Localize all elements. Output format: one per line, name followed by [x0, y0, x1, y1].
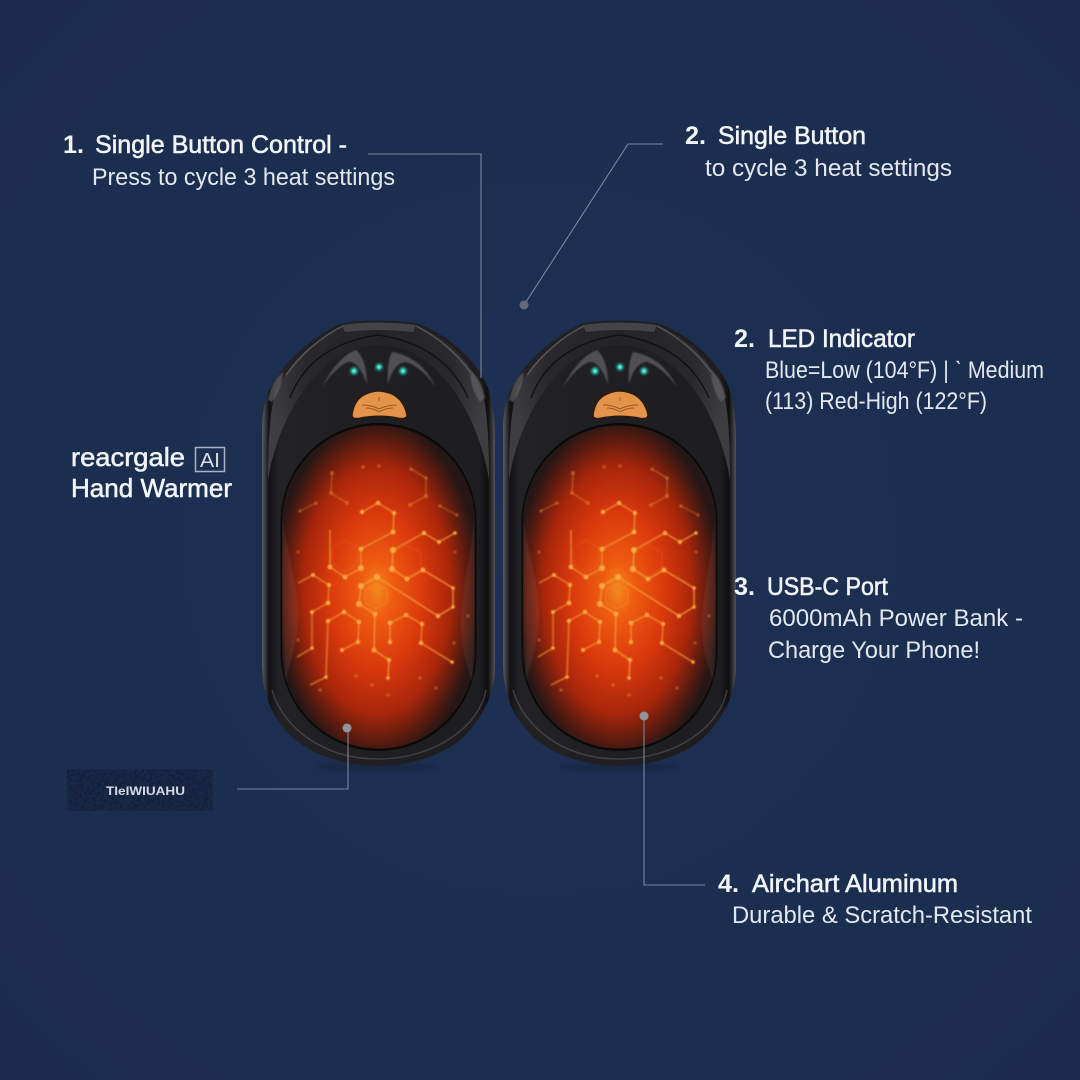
leader line: bottom left label	[237, 724, 352, 789]
brand label with noisy box: TIeIWIUAHU	[106, 784, 185, 798]
device: right hand warmer	[503, 320, 736, 771]
callout 2: single button: to cycle 3 heat settings	[705, 155, 952, 182]
leader line: callout 1	[368, 154, 481, 378]
leader line: callout 4	[640, 712, 705, 885]
leader line: callout 2 top	[520, 144, 663, 310]
product name: Hand Warmer	[71, 473, 232, 503]
callout 4: aluminum: Airchart Aluminum	[752, 870, 958, 898]
callout 3: USB-C port	[734, 573, 1023, 664]
callout 1: single button control: 1.	[63, 131, 84, 159]
callout 2: LED indicator: Blue=Low (104°F) | ˋ Medium	[765, 357, 1044, 384]
left device shell	[262, 320, 495, 771]
left device heating panel	[282, 426, 475, 748]
AI badge	[196, 448, 224, 472]
callout 4: aluminum	[718, 870, 1032, 929]
right device LED indicators	[591, 364, 648, 375]
callout 4: aluminum: Durable & Scratch-Resistant	[732, 902, 1032, 929]
device: left hand warmer	[262, 320, 495, 771]
left device circuit pattern	[296, 464, 470, 697]
product name: reacrgale	[71, 442, 185, 472]
AI badge: AI	[200, 450, 220, 472]
right device heating panel	[523, 426, 716, 748]
callout 2: single button: 2.	[685, 122, 706, 150]
brand label with noisy box	[67, 769, 213, 811]
callout 2: LED indicator: 2.	[734, 325, 755, 353]
callout 3: USB-C port: 6000mAh Power Bank -	[769, 605, 1023, 632]
callout 2: LED indicator: (113) Red-High (122°F)	[765, 388, 987, 415]
right device circuit pattern	[537, 464, 711, 697]
callout 1: single button control: Press to cycle 3 heat settings	[92, 164, 395, 191]
right device button	[593, 391, 648, 419]
callout 4: aluminum: 4.	[718, 870, 739, 898]
callout 1: single button control: Single Button Control -	[95, 131, 347, 159]
callout 2: LED indicator	[734, 325, 1044, 415]
right device shell	[503, 320, 736, 771]
callout 2: single button	[685, 122, 952, 182]
product name	[71, 442, 232, 503]
callout 3: USB-C port: 3.	[734, 573, 755, 601]
callout 1: single button control	[63, 131, 395, 191]
left device LED indicators	[350, 364, 407, 375]
callout 3: USB-C port: Charge Your Phone!	[768, 637, 980, 664]
left device button	[352, 391, 407, 419]
callout 3: USB-C port: USB-C Port	[767, 573, 888, 601]
callout 2: LED indicator: LED Indicator	[768, 325, 915, 353]
callout 2: single button: Single Button	[718, 122, 866, 150]
